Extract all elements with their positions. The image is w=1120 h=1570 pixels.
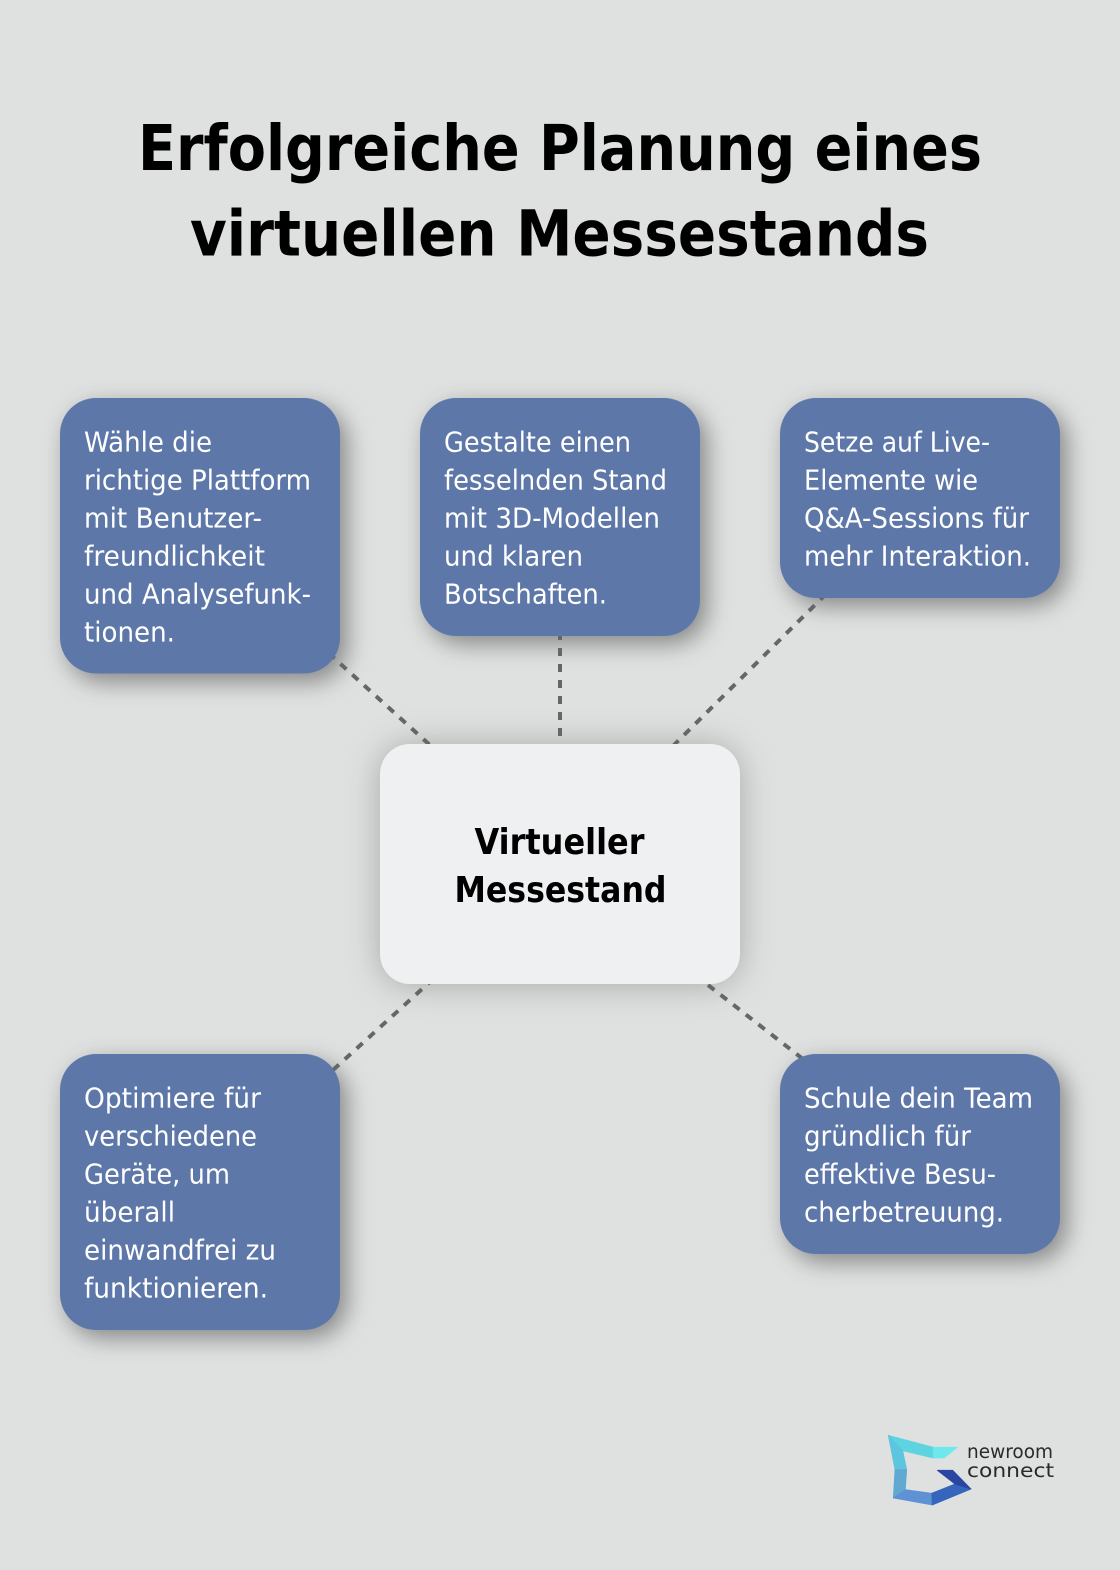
panel: choose platform xyxy=(60,398,340,674)
panel text: Geräte, um xyxy=(84,1158,230,1190)
panel: booth design xyxy=(420,398,700,636)
panel background xyxy=(780,398,1060,598)
central node label: Messestand xyxy=(454,870,666,911)
panel text: und Analysefunk- xyxy=(84,578,311,610)
panel text: freundlichkeit xyxy=(84,540,265,572)
panel text: Gestalte einen xyxy=(444,426,631,458)
panel text: mit 3D-Modellen xyxy=(444,502,660,534)
title: Erfolgreiche Planung eines xyxy=(138,112,982,185)
panel text: tionen. xyxy=(84,616,175,648)
panel text: mit Benutzer- xyxy=(84,502,262,534)
logo wordmark: newroom xyxy=(967,1440,1053,1463)
panel text: Schule dein Team xyxy=(804,1082,1033,1114)
panel text: überall xyxy=(84,1196,175,1228)
logo wordmark: connect xyxy=(967,1459,1054,1482)
panel text: Q&A-Sessions für xyxy=(804,502,1029,534)
panel text: Wähle die xyxy=(84,426,212,458)
panel background xyxy=(60,398,340,674)
panel text: einwandfrei zu xyxy=(84,1234,276,1266)
panel text xyxy=(804,1082,1033,1228)
panel text: funktionieren. xyxy=(84,1272,268,1304)
dashed connector lines xyxy=(329,594,826,1070)
panel text: und klaren xyxy=(444,540,583,572)
logo wordmark xyxy=(967,1440,1054,1482)
panel text: effektive Besu- xyxy=(804,1158,996,1190)
panel background xyxy=(780,1054,1060,1254)
panel text xyxy=(84,426,311,648)
panel: device optimisation xyxy=(60,1054,340,1330)
central node label: Virtueller xyxy=(474,822,645,863)
panel text xyxy=(444,426,667,610)
panel: live elements xyxy=(780,398,1060,598)
panel text xyxy=(84,1082,276,1304)
panel text: Setze auf Live- xyxy=(804,426,990,458)
panel background xyxy=(60,1054,340,1330)
logo: newroom connect xyxy=(888,1435,1054,1505)
title: virtuellen Messestands xyxy=(190,198,929,270)
panel: central node xyxy=(380,744,740,984)
icon: logo mark xyxy=(888,1435,971,1505)
panel text: Optimiere für xyxy=(84,1082,261,1114)
panel text: fesselnden Stand xyxy=(444,464,667,496)
panel text: richtige Plattform xyxy=(84,464,311,496)
panel text: Botschaften. xyxy=(444,578,607,610)
title xyxy=(138,112,982,270)
central node label xyxy=(454,822,666,911)
panel background xyxy=(420,398,700,636)
panel: team training xyxy=(780,1054,1060,1254)
panel text: Elemente wie xyxy=(804,464,978,496)
central node background xyxy=(380,744,740,984)
panel text: verschiedene xyxy=(84,1120,257,1152)
panel text: mehr Interaktion. xyxy=(804,540,1031,572)
panel text: cherbetreuung. xyxy=(804,1196,1004,1228)
panel text: gründlich für xyxy=(804,1120,971,1152)
panel text xyxy=(804,426,1031,572)
